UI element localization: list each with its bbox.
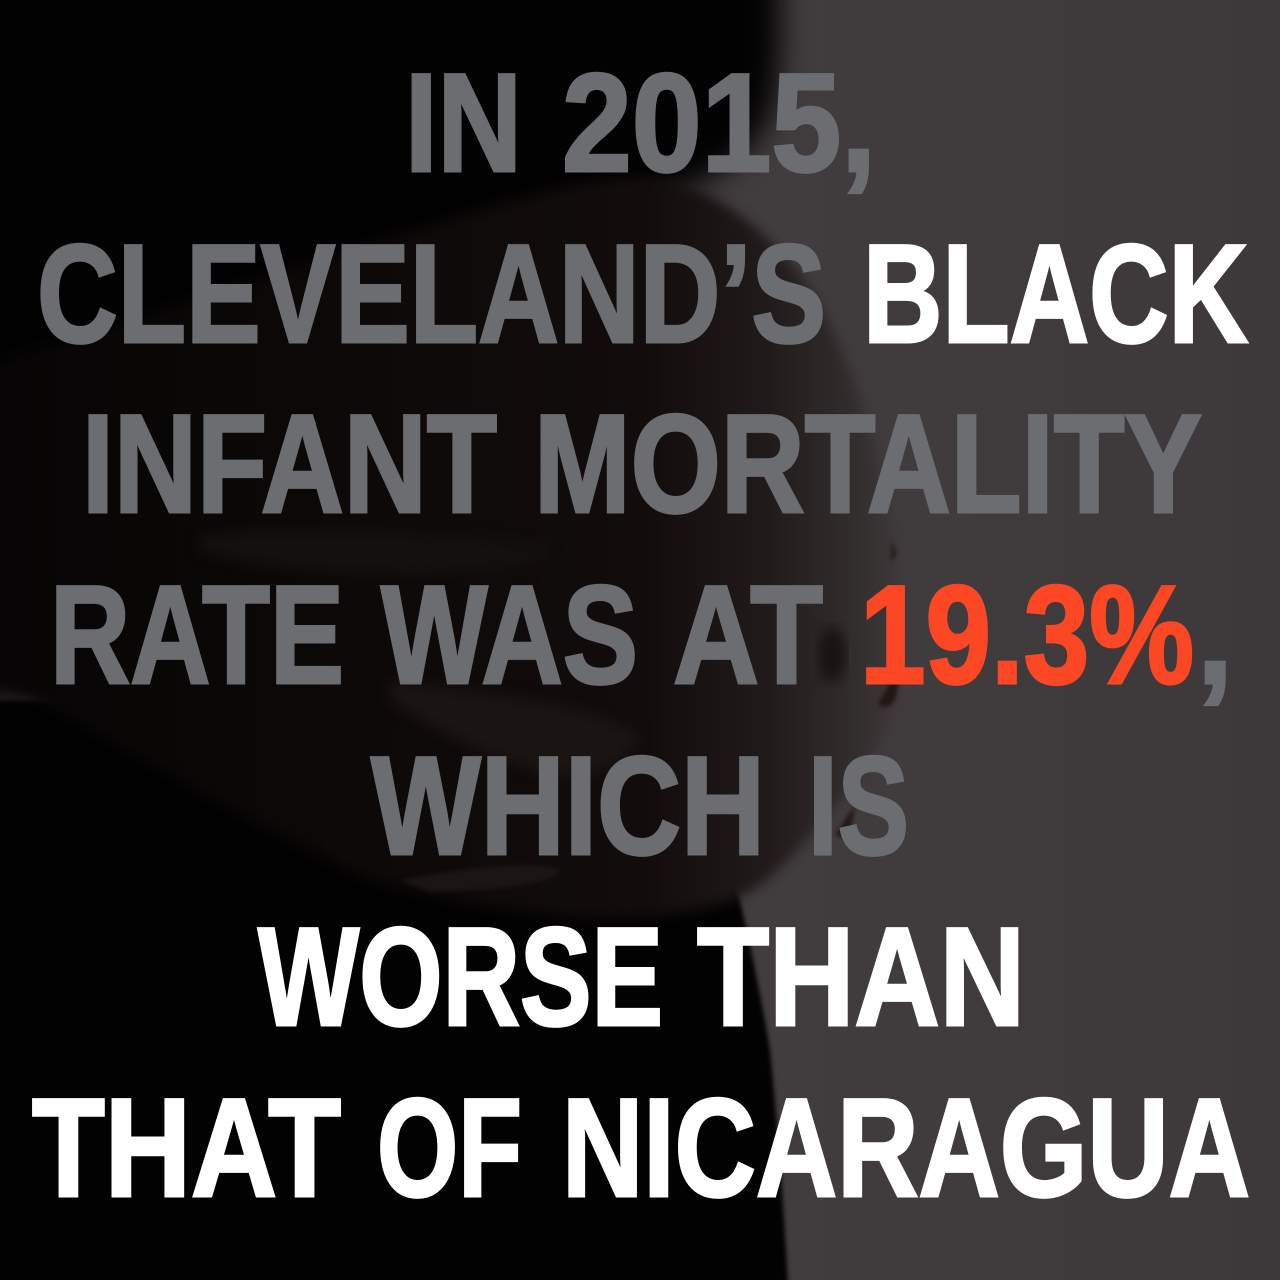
line: INFANT MORTALITY: INFANT [82, 385, 497, 542]
highlight: THAT OF NICARAGUA: OF [377, 1069, 522, 1226]
line: IN 2015,: IN [405, 44, 522, 201]
line: RATE WAS AT: RATE [50, 556, 344, 713]
line: IN 2015,: 2015, [562, 44, 876, 201]
line: RATE WAS AT [50, 556, 823, 713]
line: IN 2015, [405, 44, 876, 201]
highlight: WORSE THAN: WORSE [258, 898, 663, 1055]
line: WHICH IS: IS [808, 727, 909, 884]
highlight: WORSE THAN: THAN [697, 898, 1025, 1055]
shadow marks at belly edge [835, 540, 898, 840]
highlight: WORSE THAN [258, 898, 1025, 1055]
highlight: THAT OF NICARAGUA: THAT [32, 1069, 341, 1226]
highlight: THAT OF NICARAGUA [32, 1069, 1250, 1226]
upper hand fingers [200, 529, 552, 575]
lower hand fingers [390, 680, 640, 776]
line: INFANT MORTALITY [82, 385, 1202, 542]
line: WHICH IS: WHICH [371, 727, 765, 884]
line: RATE WAS AT: AT [673, 556, 823, 713]
highlight: 19.3%: 19.3% [860, 556, 1194, 713]
comma after percentage: , [1197, 556, 1233, 713]
line: CLEVELAND'S: CLEVELAND’S [37, 215, 826, 372]
belly button [818, 627, 846, 683]
line: RATE WAS AT: WAS [381, 556, 638, 713]
